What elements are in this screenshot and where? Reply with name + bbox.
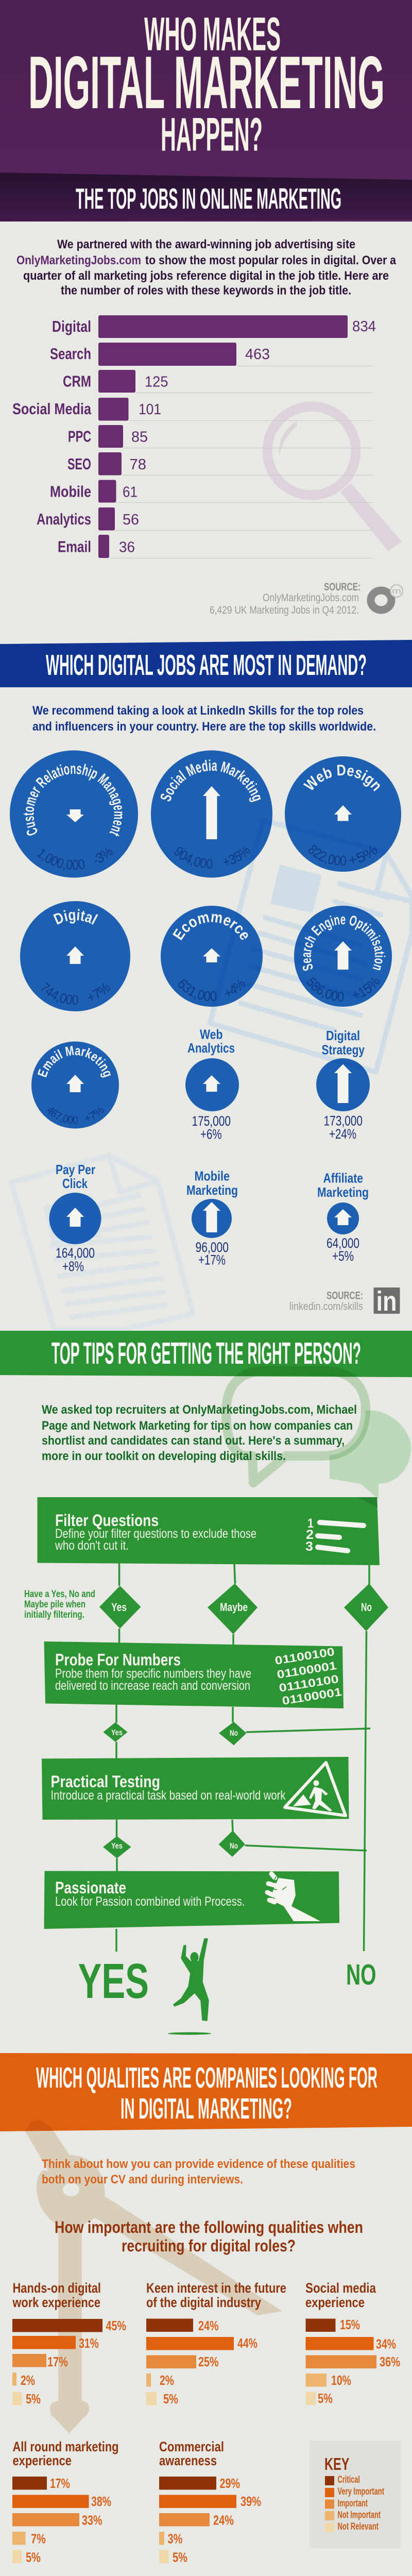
bubble: web design: Web Design	[303, 765, 380, 791]
title: HAPPEN?	[161, 108, 263, 161]
bubble: search engine optimisation: Search Engine Optimisation	[303, 916, 385, 971]
decision: no: No	[361, 1601, 372, 1614]
decision: no	[344, 1584, 388, 1631]
step: filter questions: Define your filter questions to exclude those	[55, 1527, 256, 1541]
bubble: web design	[285, 756, 401, 872]
step: passionate	[44, 1871, 339, 1929]
icon: numbered list	[305, 1516, 364, 1554]
chart: hands-on digital work experience: Hands-on digital	[12, 2280, 101, 2296]
icon: road works sign	[285, 1762, 346, 1816]
bubble: web design: 822,000	[308, 845, 346, 866]
decision: yes: Yes	[111, 1601, 127, 1614]
step: practical testing	[42, 1757, 349, 1820]
outcome: no: NO	[346, 1958, 376, 1991]
legend: key: Important	[338, 2498, 368, 2509]
skill: web analytics: Analytics	[187, 1040, 235, 1056]
bubble: customer relationship management: Customer Relationship Management	[24, 764, 123, 837]
chart: social media experience	[305, 2280, 400, 2406]
step: probe for numbers	[44, 1641, 344, 1708]
skill: mobile marketing: +17%	[198, 1252, 226, 1267]
chart: commercial awareness: 3%	[168, 2531, 182, 2546]
source: OnlyMarketingJobs: OnlyMarketingJobs.com	[263, 592, 359, 604]
bar chart: roles by keyword: 78	[130, 456, 146, 473]
icon: outline speech bubble	[226, 1371, 366, 1483]
bubble: digital: Digital	[53, 909, 98, 925]
chart: hands-on digital work experience: 17%	[47, 2354, 68, 2369]
decision: no 2: No	[230, 1729, 238, 1738]
step: filter questions	[37, 1497, 380, 1565]
skill: affiliate marketing	[317, 1171, 369, 1264]
bubble: email marketing: Email Marketing	[37, 1046, 111, 1078]
background icon: document left	[11, 1156, 193, 1329]
intro text: top jobs	[16, 238, 397, 298]
source: linkedin: SOURCE:	[327, 1290, 363, 1301]
source: linkedin	[289, 1286, 400, 1317]
note: yes no maybe pile	[24, 1589, 95, 1620]
skill: digital strategy: 173,000	[323, 1113, 363, 1128]
chart: commercial awareness: Commercial	[159, 2439, 224, 2454]
bar chart: roles by keyword: Search	[50, 345, 91, 363]
intro text: recruiters: We asked top recruiters at OnlyMarketingJobs.com, Michael	[42, 1403, 357, 1417]
decision: yes	[99, 1586, 141, 1629]
bar chart: roles by keyword: 36	[119, 539, 135, 555]
bar chart: roles by keyword: Mobile	[50, 482, 91, 501]
chart: all round marketing experience: 38%	[91, 2494, 111, 2509]
note: yes no maybe pile: Maybe pile when	[24, 1599, 85, 1610]
step: practical testing: Introduce a practical task based on real-world work	[50, 1788, 286, 1803]
bar chart: roles by keyword	[12, 315, 376, 558]
step: filter questions: who don't cut it.	[55, 1538, 129, 1553]
icon: binary numbers	[274, 1645, 342, 1707]
chart: hands-on digital work experience: 45%	[106, 2318, 126, 2333]
chart: social media experience: 5%	[318, 2391, 333, 2406]
bubble: social media marketing: Social Media Marketing	[161, 759, 261, 802]
bubble: social media marketing	[151, 750, 272, 878]
legend: key	[310, 2441, 401, 2548]
chart: hands-on digital work experience: 31%	[79, 2335, 99, 2351]
bar chart: roles by keyword: 56	[123, 512, 139, 528]
source: linkedin: linkedin.com/skills	[289, 1300, 363, 1313]
banner: which qualities	[0, 2053, 412, 2131]
chart: hands-on digital work experience: work experience	[12, 2295, 100, 2310]
chart: keen interest: 2%	[160, 2372, 174, 2388]
source: OnlyMarketingJobs	[210, 581, 403, 616]
bar chart: roles by keyword: PPC	[68, 428, 91, 445]
skill: digital strategy	[316, 1028, 370, 1142]
chart: keen interest	[146, 2280, 286, 2406]
header panel	[0, 0, 412, 222]
bar chart: roles by keyword: 834	[352, 318, 376, 335]
intro text: recruiters: shortlist and candidates can stand out. Here's a summary,	[42, 1434, 345, 1448]
decision: yes 2	[103, 1722, 128, 1742]
bubble: email marketing	[31, 1042, 119, 1128]
intro text: linkedin skills	[32, 704, 376, 734]
bar chart: roles by keyword: CRM	[63, 372, 91, 391]
icon: raised fist	[267, 1874, 320, 1921]
intro text: linkedin skills: We recommend taking a look at LinkedIn Skills for the top roles	[32, 704, 364, 718]
chart: commercial awareness: 24%	[213, 2512, 234, 2528]
chart: social media experience: experience	[305, 2295, 365, 2310]
intro text: top jobs: OnlyMarketingJobs.com	[16, 253, 141, 267]
skill: mobile marketing: Marketing	[186, 1182, 238, 1198]
icon: binary numbers: 01100001	[276, 1659, 337, 1681]
intro text: top jobs: We partnered with the award-winning job advertising site	[57, 238, 355, 251]
chart: social media experience: 34%	[376, 2336, 396, 2351]
skill: pay per click: Click	[62, 1176, 88, 1191]
decision: no 3: No	[230, 1842, 238, 1851]
step: passionate: Look for Passion combined with Process.	[55, 1894, 245, 1909]
skill: affiliate marketing: Marketing	[317, 1184, 369, 1200]
step: probe for numbers: delivered to increase reach and conversion	[55, 1679, 250, 1693]
source: OnlyMarketingJobs: 6,429 UK Marketing Jobs in Q4 2012.	[210, 604, 359, 616]
chart: hands-on digital work experience: 5%	[26, 2391, 41, 2406]
icon: numbered list: 2	[306, 1528, 314, 1542]
skill: pay per click	[49, 1162, 101, 1274]
bar chart: roles by keyword: 125	[145, 374, 168, 391]
background icon: speech bubbles	[226, 1371, 411, 1499]
legend: key: Critical	[338, 2475, 360, 2485]
bubble: ecommerce: +4%	[225, 979, 245, 996]
background icon: document right	[210, 820, 412, 1072]
legend: key: Not Important	[338, 2510, 381, 2520]
chart: keen interest: 24%	[198, 2318, 218, 2333]
heading: how important: recruiting for digital roles?	[122, 2236, 296, 2255]
banner: which digital jobs	[0, 640, 412, 687]
flowchart	[24, 1497, 388, 1952]
step: probe for numbers: Probe them for specific numbers they have	[55, 1666, 251, 1681]
decision: yes 2: Yes	[111, 1728, 123, 1737]
bubble: ecommerce	[161, 906, 263, 1007]
chart: all round marketing experience: 33%	[82, 2512, 102, 2528]
skill: pay per click: Pay Per	[56, 1162, 95, 1177]
chart: commercial awareness: 39%	[241, 2494, 261, 2509]
icon: numbered list: 1	[307, 1516, 314, 1531]
chart: all round marketing experience: 17%	[50, 2476, 70, 2491]
bubble: digital	[20, 901, 130, 1011]
bubble: customer relationship management	[10, 750, 138, 878]
icon: magnifying glass	[267, 406, 402, 551]
step: probe for numbers: Probe For Numbers	[55, 1651, 181, 1669]
chart: social media experience: 15%	[340, 2317, 360, 2332]
chart: social media experience: 10%	[331, 2372, 351, 2388]
bar chart: roles by keyword: 85	[131, 429, 148, 445]
background icon: compass dividers	[25, 2120, 282, 2433]
decision: yes 3: Yes	[111, 1842, 123, 1851]
icon: binary numbers: 01110100	[278, 1672, 339, 1694]
bubble: digital: +7%	[88, 983, 110, 1001]
chart: keen interest: 25%	[198, 2354, 218, 2369]
skill: digital strategy: Digital	[326, 1028, 360, 1043]
icon: OnlyMarketingJobs logo	[371, 585, 403, 610]
skill: digital strategy: +24%	[329, 1126, 356, 1142]
decision: no 2	[219, 1722, 246, 1745]
chart: hands-on digital work experience: 2%	[21, 2372, 35, 2388]
bubble: social media marketing: +35%	[224, 846, 250, 866]
icon: binary numbers: 01100100	[274, 1645, 335, 1667]
bubble: customer relationship management: 1,000,000	[37, 849, 84, 871]
decision: maybe: Maybe	[220, 1601, 248, 1614]
icon: numbered list: 3	[305, 1539, 313, 1554]
skill: mobile marketing	[186, 1168, 238, 1267]
bubble: ecommerce: 631,000	[178, 980, 216, 1002]
bubble: email marketing: +7%	[85, 1107, 104, 1121]
chart: keen interest: of the digital industry	[146, 2295, 261, 2310]
chart: all round marketing experience: 7%	[31, 2531, 46, 2546]
connectors	[116, 1563, 370, 1952]
chart: keen interest: 5%	[163, 2391, 178, 2406]
title	[28, 8, 385, 161]
source: OnlyMarketingJobs: SOURCE:	[324, 581, 360, 593]
outcome: yes: YES	[78, 1954, 149, 2009]
skill: web analytics: 175,000	[192, 1113, 231, 1129]
skill: mobile marketing: Mobile	[195, 1168, 230, 1184]
chart: all round marketing experience: experience	[12, 2453, 72, 2468]
bar chart: roles by keyword: 463	[245, 346, 270, 363]
legend: key: Very Important	[338, 2486, 384, 2497]
note: yes no maybe pile: Have a Yes, No and	[24, 1589, 95, 1600]
chart: commercial awareness	[159, 2439, 261, 2565]
bubble: ecommerce: Ecommerce	[173, 914, 248, 941]
bar chart: roles by keyword: 61	[123, 484, 138, 501]
bar chart: roles by keyword: Digital	[52, 317, 91, 335]
bubble: web design: +5%	[349, 846, 377, 863]
skill: digital strategy: Strategy	[321, 1042, 365, 1057]
bubble: search engine optimisation: 586,000	[307, 977, 344, 1002]
intro text: recruiters: more in our toolkit on developing digital skills.	[42, 1449, 286, 1463]
bar chart: roles by keyword: Social Media	[12, 400, 92, 418]
chart: hands-on digital work experience	[12, 2280, 126, 2406]
chart: all round marketing experience	[12, 2439, 118, 2565]
bar chart: roles by keyword: Analytics	[37, 510, 91, 528]
note: yes no maybe pile: initially filtering.	[24, 1609, 84, 1620]
intro text: top jobs: the number of roles with these keywords in the job title.	[61, 283, 351, 298]
decision: no 3	[218, 1831, 245, 1857]
intro text: qualities: both on your CV and during interviews.	[42, 2173, 243, 2187]
icon: binary numbers: 01100001	[281, 1685, 342, 1707]
skill: web analytics: Web	[200, 1026, 222, 1042]
step: filter questions: Filter Questions	[55, 1511, 159, 1530]
intro text: linkedin skills: and influencers in your country. Here are the top skills worldwide.	[32, 720, 376, 734]
bubble: search engine optimisation	[294, 906, 392, 1007]
intro text: qualities	[42, 2157, 355, 2187]
chart: all round marketing experience: All round marketing	[12, 2439, 118, 2454]
chart: commercial awareness: 29%	[219, 2476, 240, 2491]
bubble: email marketing: 467,000	[47, 1108, 78, 1124]
bubble: customer relationship management: -3%	[94, 847, 113, 862]
skill: mobile marketing: 96,000	[196, 1240, 229, 1255]
bar chart: roles by keyword: SEO	[67, 455, 91, 473]
bubble: social media marketing: 904,000	[174, 847, 212, 869]
banner: the top jobs	[0, 173, 412, 221]
chart: all round marketing experience: 5%	[26, 2549, 41, 2565]
bar chart: roles by keyword: Email	[58, 538, 91, 555]
step: passionate: Passionate	[55, 1878, 126, 1897]
skill: web analytics: +6%	[200, 1126, 221, 1142]
chart: social media experience: Social media	[305, 2280, 376, 2296]
skill: web analytics	[185, 1026, 239, 1142]
decision: yes 3	[103, 1836, 131, 1858]
bar chart: roles by keyword: 101	[139, 401, 161, 418]
skill: affiliate marketing: 64,000	[327, 1235, 359, 1251]
skill: affiliate marketing: +5%	[332, 1248, 354, 1264]
bubble: search engine optimisation: +15%	[353, 977, 380, 998]
intro text: qualities: Think about how you can provide evidence of these qualities	[42, 2157, 355, 2171]
icon: linkedin logo: in	[376, 1286, 397, 1317]
banner: top tips	[0, 1331, 412, 1377]
legend: key: Not Relevant	[338, 2521, 379, 2532]
icon: jumping figure	[168, 1939, 211, 2035]
legend: key: KEY	[324, 2454, 349, 2473]
bubble: digital: 744,000	[41, 982, 78, 1005]
skill: pay per click: 164,000	[56, 1245, 95, 1261]
intro text: recruiters: Page and Network Marketing for tips on how companies can	[42, 1419, 353, 1433]
skill: pay per click: +8%	[62, 1259, 84, 1274]
icon: OnlyMarketingJobs logo: m	[392, 587, 401, 596]
chart: keen interest: Keen interest in the future	[146, 2280, 286, 2296]
chart: keen interest: 44%	[237, 2335, 258, 2351]
decision: maybe	[208, 1584, 258, 1634]
chart: social media experience: 36%	[380, 2354, 400, 2369]
chart: commercial awareness: awareness	[159, 2453, 217, 2468]
intro text: recruiters	[42, 1403, 357, 1463]
heading: how important	[55, 2218, 363, 2255]
chart: commercial awareness: 5%	[173, 2549, 187, 2565]
step: practical testing: Practical Testing	[50, 1772, 160, 1791]
skill: affiliate marketing: Affiliate	[323, 1171, 363, 1186]
